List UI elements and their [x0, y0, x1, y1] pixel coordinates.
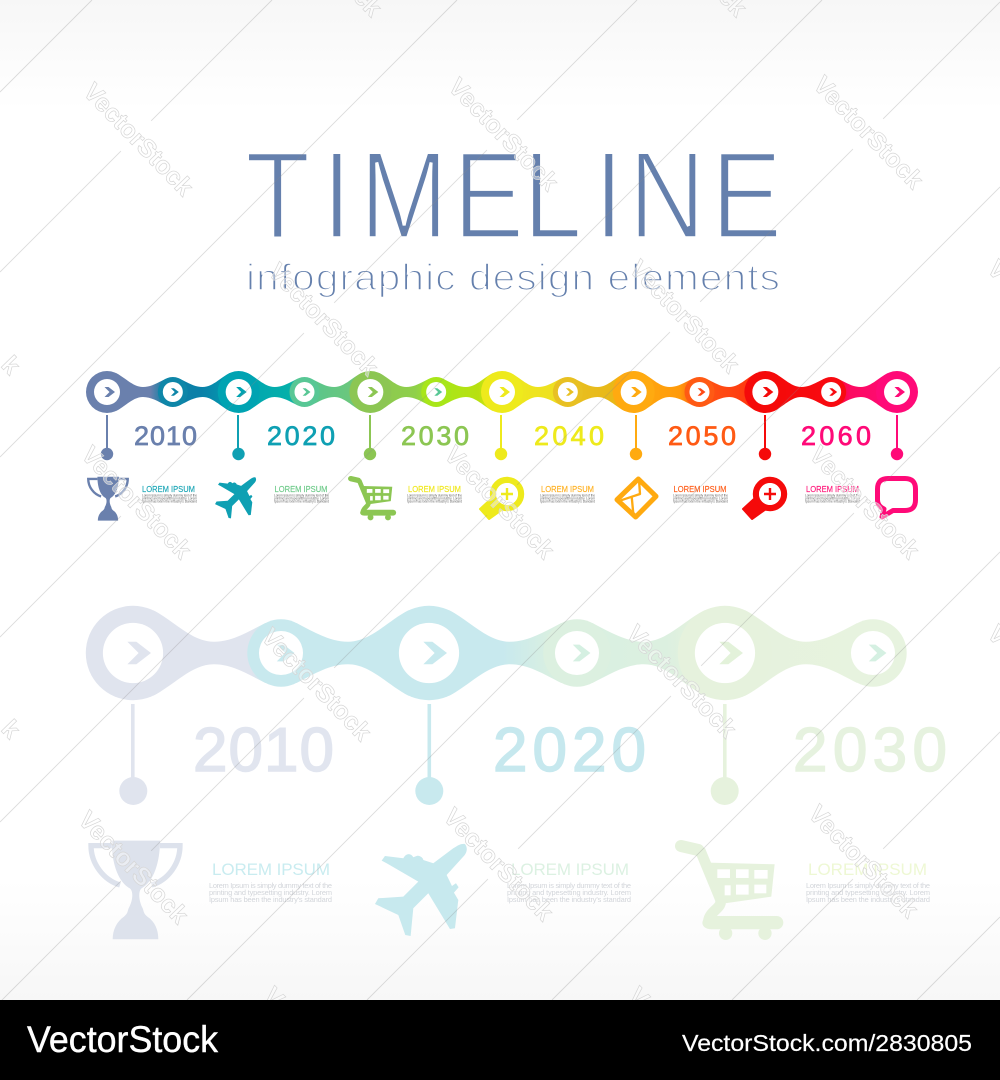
- icon: trophy: [88, 477, 128, 521]
- watermark text: VectorStock: [624, 255, 745, 379]
- upper year labels: 2050: [668, 421, 736, 451]
- upper lorem text blocks: Ipsum has been the industry's standard: [274, 500, 329, 504]
- upper lorem text blocks: LOREM IPSUM: [674, 485, 727, 494]
- icon: large shopping cart: [681, 846, 783, 940]
- upper lorem text blocks: printing and typesetting industry. Lorem: [673, 496, 728, 500]
- upper year labels: [134, 421, 871, 451]
- lower lorem text blocks: LOREM IPSUM: [808, 860, 927, 879]
- lower lorem text blocks: printing and typesetting industry. Lorem: [507, 888, 631, 897]
- lower lorem text blocks: Ipsum has been the industry's standard: [507, 895, 631, 904]
- lower lorem text blocks: Ipsum has been the industry's standard: [806, 895, 930, 904]
- watermark text: VectorStock: [439, 441, 560, 565]
- upper timeline chain: [86, 371, 918, 413]
- icon: speech bubble: [878, 478, 916, 517]
- footer bar: [0, 1000, 1000, 1080]
- lower lorem text blocks: Lorem Ipsum is simply dummy text of the: [806, 881, 930, 890]
- upper lorem text blocks: printing and typesetting industry. Lorem: [407, 496, 462, 500]
- icon: shopping cart: [351, 479, 396, 520]
- watermark text: VectorStock: [78, 78, 199, 202]
- upper lorem text blocks: Lorem Ipsum is simply dummy text of the: [540, 494, 595, 498]
- icon: large trophy: [91, 841, 180, 939]
- upper lorem text blocks: Lorem Ipsum is simply dummy text of the: [142, 494, 197, 498]
- watermark text: VectorStock: [621, 620, 742, 744]
- upper lorem text blocks: Ipsum has been the industry's standard: [540, 500, 595, 504]
- lower lorem text blocks: printing and typesetting industry. Lorem: [209, 888, 332, 897]
- icon: airplane: [215, 477, 256, 518]
- upper lorem text blocks: Ipsum has been the industry's standard: [673, 500, 728, 504]
- upper year labels: 2030: [401, 421, 469, 451]
- subtitle: infographic design elements: [246, 257, 781, 298]
- watermark text: V: [258, 982, 290, 1013]
- icon: red magnifier: [743, 480, 784, 519]
- upper lorem text blocks: printing and typesetting industry. Lorem: [142, 496, 197, 500]
- title: TIMELINE: [245, 125, 782, 265]
- upper lorem text blocks: printing and typesetting industry. Lorem: [274, 496, 329, 500]
- watermark text: V: [623, 982, 655, 1013]
- lower lorem text blocks: LOREM IPSUM: [511, 860, 629, 879]
- watermark text: VectorStock: [256, 623, 377, 747]
- watermark text: VectorStock: [443, 73, 564, 197]
- lower lorem text blocks: Ipsum has been the industry's standard: [209, 895, 332, 904]
- upper year labels: 2020: [267, 421, 335, 451]
- lower lorem text blocks: printing and typesetting industry. Lorem: [806, 888, 930, 897]
- watermark text: VectorStock: [804, 441, 925, 565]
- lower year labels: [193, 716, 947, 785]
- upper lorem text blocks: LOREM IPSUM: [142, 485, 195, 494]
- icon: large airplane: [375, 844, 467, 936]
- upper lorem text blocks: Lorem Ipsum is simply dummy text of the: [673, 494, 728, 498]
- watermark text: VectorStock: [438, 803, 559, 927]
- upper lorem text blocks: Ipsum has been the industry's standard: [407, 500, 462, 504]
- watermark text: VectorStock: [76, 441, 197, 565]
- lower lorem text blocks: Lorem Ipsum is simply dummy text of the: [209, 881, 332, 890]
- upper lorem text blocks: Lorem Ipsum is simply dummy text of the: [805, 494, 860, 498]
- lower enlarged chain: [86, 606, 907, 700]
- upper lorem text blocks: LOREM IPSUM: [541, 485, 594, 494]
- upper lorem text blocks: LOREM IPSUM: [806, 485, 859, 494]
- watermark text: VectorStock: [808, 71, 929, 195]
- lower lorem text blocks: Lorem Ipsum is simply dummy text of the: [507, 881, 631, 890]
- upper lorem text blocks: LOREM IPSUM: [408, 485, 461, 494]
- footer bar: VectorStock.com/2830805: [682, 1030, 972, 1056]
- upper lorem text blocks: [142, 485, 860, 504]
- upper lorem text blocks: Ipsum has been the industry's standard: [142, 500, 197, 504]
- footer bar: VectorStock: [27, 1019, 218, 1060]
- lower year labels: 2010: [193, 716, 334, 785]
- icon: envelope: [617, 479, 656, 517]
- upper lorem text blocks: LOREM IPSUM: [274, 485, 328, 494]
- upper year labels: 2010: [134, 421, 197, 451]
- upper lorem text blocks: Lorem Ipsum is simply dummy text of the: [407, 494, 462, 498]
- upper lorem text blocks: printing and typesetting industry. Lorem: [540, 496, 595, 500]
- watermark text: VectorStock: [263, 258, 384, 382]
- upper lorem text blocks: Lorem Ipsum is simply dummy text of the: [274, 494, 329, 498]
- upper lorem text blocks: Ipsum has been the industry's standard: [805, 500, 860, 504]
- upper year labels: 2060: [801, 421, 871, 451]
- watermark text: VectorStock: [73, 806, 194, 930]
- lower year labels: 2030: [793, 716, 947, 785]
- lower lorem text blocks: LOREM IPSUM: [212, 860, 330, 879]
- lower lorem text blocks: [209, 860, 930, 904]
- upper year labels: 2040: [534, 421, 604, 451]
- watermark text: VectorStock: [803, 800, 924, 924]
- lower connector stems and dots: [119, 704, 739, 805]
- upper lorem text blocks: printing and typesetting industry. Lorem: [805, 496, 860, 500]
- upper connector stems and dots: [101, 415, 903, 460]
- lower year labels: 2020: [493, 716, 646, 785]
- icon: yellow magnifier: [480, 480, 521, 519]
